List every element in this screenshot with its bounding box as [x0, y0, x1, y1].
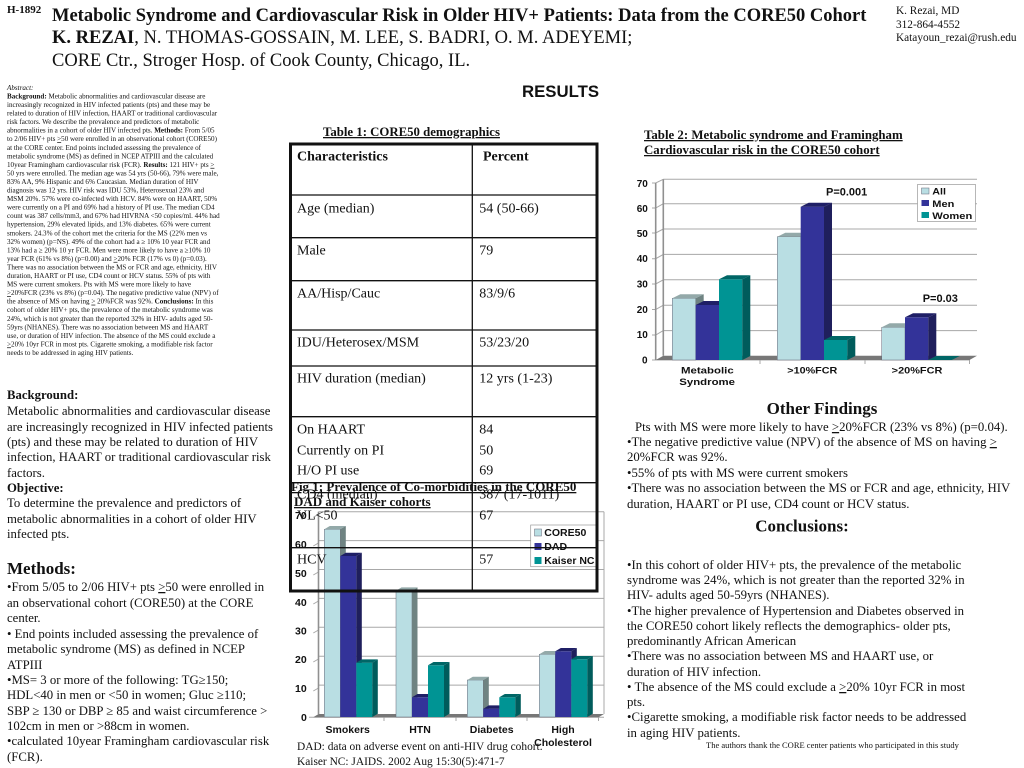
- metabolic syndrome bars: [672, 275, 750, 360]
- conclusions text: syndrome was 24%, which is not greater than the reported 32% in: [627, 573, 965, 587]
- y axis labels: 20: [637, 305, 648, 316]
- diabetes bars: [467, 677, 521, 717]
- methods text: (FCR).: [7, 750, 43, 764]
- abstract text: hypertension, 29% elevated lipids, and 13% diabetes. 65% were current: [7, 221, 211, 229]
- table 1 demographics: Percent: [483, 150, 529, 164]
- p value labels: P=0.03: [923, 293, 958, 305]
- legend: DAD: [544, 541, 567, 553]
- legend: Kaiser NC: [544, 555, 595, 567]
- table 1 demographics: 54 (50-66): [479, 202, 539, 216]
- other findings heading: Other Findings: [767, 399, 878, 418]
- conclusions heading: Conclusions:: [755, 516, 849, 536]
- methods text: [7, 559, 270, 764]
- abstract text: duration, HAART or PI use, CD4 count or HCV status. 55% of pts with: [7, 272, 211, 280]
- abstract text: MSM 20%. 57% were co-infected with HCV. 84% were on HAART, 50%: [7, 195, 217, 203]
- conclusions text: •In this cohort of older HIV+ pts, the prevalence of the metabolic: [627, 558, 962, 572]
- abstract text: 10year Framingham cardiovascular risk (FCR). Results: 121 HIV+ pts >: [7, 161, 214, 169]
- methods text: an observational cohort (CORE50) at the CORE: [7, 596, 254, 610]
- figure 1 footnote: [297, 741, 543, 768]
- 10 percent FCR bars: [777, 203, 855, 360]
- poster id: H-1892: [7, 4, 42, 16]
- table 1 demographics: H/O PI use: [297, 464, 359, 478]
- background and objective text: infection, HAART or traditional cardiovascular risk: [7, 450, 271, 464]
- table 1 demographics: Age (median): [297, 202, 375, 216]
- x axis labels: Syndrome: [679, 377, 735, 388]
- legend: Women: [932, 211, 972, 222]
- table 1 demographics: 79: [479, 244, 493, 258]
- y axis labels: [637, 179, 648, 366]
- abstract text: year FCR (61% vs 8%) (p=0.00) and >20% FCR (17% vs 0) (p=0.03).: [7, 255, 207, 263]
- x axis labels: Metabolic: [681, 366, 734, 376]
- table 1 demographics: 67: [479, 508, 493, 524]
- abstract text: diagnosis was 12 yrs. HIV risk was IDU 53%, Heterosexual 23% and: [7, 186, 205, 194]
- figure 1 footnote: Kaiser NC: JAIDS. 2002 Aug 15:30(5):471-7: [297, 756, 505, 768]
- abstract text: related to duration of HIV infection, HAART or traditional cardiovascular: [7, 110, 218, 118]
- background and objective text: (pts) and these may be related to duration of HIV: [7, 435, 259, 449]
- table 1 demographics: 50: [479, 444, 493, 458]
- legend: Men: [932, 199, 954, 210]
- abstract text: at the CORE center. End points included assessing the prevalence of: [7, 144, 202, 152]
- table 2 caption: Cardiovascular risk in the CORE50 cohort: [644, 143, 880, 157]
- x axis labels: >10%FCR: [787, 366, 837, 376]
- table 1 demographics: 57: [479, 552, 493, 568]
- background and objective text: Metabolic abnormalities and cardiovascular disease: [7, 404, 271, 418]
- abstract text: >20%FCR (23% vs 8%) (p=0.04). The negative predictive value (NPV) of: [7, 289, 219, 297]
- table 2 caption: [644, 128, 903, 157]
- background and objective text: infected pts.: [7, 527, 69, 541]
- x axis labels: Smokers: [326, 724, 370, 736]
- table 1 demographics: 84: [479, 422, 493, 438]
- title block: [52, 6, 867, 71]
- abstract text: metabolic syndrome (MS) as defined in NCEP ATPIII and the calculated: [7, 152, 214, 160]
- legend: [918, 184, 976, 222]
- high cholesterol bars: [539, 648, 593, 717]
- abstract text: MS were current smokers. Pts with MS were more likely to have: [7, 281, 191, 289]
- table 1 demographics: VL<50: [297, 508, 338, 524]
- table 2 bar chart: [637, 179, 977, 388]
- x axis labels: [326, 724, 592, 749]
- background and objective text: factors.: [7, 466, 45, 480]
- other findings text: 20%FCR was 92%.: [627, 450, 728, 464]
- conclusions text: pts.: [627, 695, 645, 709]
- abstract text: 32% women) (p=NS). 49% of the cohort had a ≥ 10% 10 year FCR and: [7, 238, 211, 246]
- abstract text: use, or duration of HIV infection. The absence of the MS could exclude a: [7, 332, 216, 340]
- background and objective text: To determine the prevalence and predictors of: [7, 496, 242, 510]
- contact details: [896, 5, 1017, 44]
- abstract text: abnormalities in a cohort of older HIV infected pts. Methods: From 5/05: [7, 127, 215, 135]
- x axis labels: High: [551, 724, 575, 736]
- other findings text: •55% of pts with MS were current smokers: [627, 466, 848, 480]
- background and objective text: [7, 388, 273, 541]
- methods text: •From 5/05 to 2/06 HIV+ pts >50 were enrolled in: [7, 580, 265, 594]
- table 1 demographics: 12 yrs (1-23): [479, 372, 553, 386]
- figure 1 caption: Fig 1: Prevalence of Co-morbidities in the CORE50: [291, 479, 576, 494]
- table 1 demographics: CD4 (median): [297, 488, 378, 502]
- x axis labels: Diabetes: [470, 724, 514, 736]
- y axis labels: 50: [637, 229, 648, 240]
- abstract text: smokers. 24.3% of the cohort met the criteria for the MS (22% men vs: [7, 229, 207, 237]
- table 1 demographics: Currently on PI: [297, 444, 384, 458]
- figure 1 caption: DAD and Kaiser cohorts: [294, 494, 431, 509]
- methods text: HDL<40 in men or <50 in women; Gluc ≥110;: [7, 688, 246, 702]
- abstract text: Background: Metabolic abnormalities and cardiovascular disease are: [7, 92, 205, 100]
- methods text: metabolic syndrome (MS) as defined in NCEP: [7, 642, 245, 656]
- x axis labels: HTN: [409, 724, 431, 736]
- x axis labels: >20%FCR: [892, 366, 942, 376]
- conclusions text: in aging HIV patients.: [627, 726, 740, 740]
- conclusions text: •There was no association between MS and HAART use, or: [627, 649, 934, 663]
- abstract text: needs to be addressed in aging HIV patients.: [7, 349, 134, 357]
- methods text: ATPIII: [7, 658, 42, 672]
- other findings text: duration, HAART or PI use, CD4 count or HCV status.: [627, 497, 909, 511]
- other findings text: [627, 420, 1011, 511]
- table 1 demographics: 53/23/20: [479, 336, 529, 350]
- abstract text: cohort of older HIV+ pts, the prevalence of the metabolic syndrome was: [7, 306, 213, 314]
- background and objective text: metabolic abnormalities in a cohort of older HIV: [7, 512, 257, 526]
- background and objective text: are increasingly recognized in HIV infected patients: [7, 420, 273, 434]
- legend: All: [932, 186, 946, 198]
- smokers bars: [324, 526, 378, 717]
- abstract text: risk factors. We describe the prevalence and predictors of metabolic: [7, 118, 199, 126]
- abstract text: 13% had a ≥ 20% 10 yr FCR. Men were more likely to have a ≥10% 10: [7, 246, 211, 254]
- y axis labels: 0: [301, 712, 307, 724]
- table 2 caption: Table 2: Metabolic syndrome and Framingham: [644, 128, 903, 142]
- y axis labels: 10: [637, 330, 648, 341]
- abstract text: 24%, which is not greater than the reported 32% in HIV- adults aged 50-: [7, 315, 213, 323]
- x axis labels: Cholesterol: [534, 737, 592, 749]
- background and objective text: Objective:: [7, 481, 64, 495]
- abstract text: were currently on a PI and 69% had a history of PI use. The median CD4: [7, 204, 215, 212]
- other findings text: •The negative predictive value (NPV) of the absence of MS on having >: [627, 435, 997, 449]
- methods text: •MS= 3 or more of the following: TG≥150;: [7, 673, 228, 687]
- legend: CORE50: [544, 527, 586, 539]
- legend: [531, 525, 597, 567]
- methods text: Methods:: [7, 559, 76, 578]
- methods text: •calculated 10year Framingham cardiovascular risk: [7, 734, 270, 748]
- y axis labels: 30: [295, 626, 307, 638]
- y axis labels: 70: [637, 179, 648, 190]
- table 1 demographics: [290, 144, 597, 591]
- contact details: 312-864-4552: [896, 19, 960, 31]
- abstract text: >20% 10yr FCR in most pts. Cigarette smoking, a modifiable risk factor: [7, 340, 213, 348]
- contact details: Katayoun_rezai@rush.edu: [896, 32, 1017, 44]
- acknowledgement: The authors thank the CORE center patients who participated in this study: [706, 740, 960, 750]
- table 1 demographics: Characteristics: [297, 150, 389, 164]
- table 1 demographics: 387 (17-1011): [479, 488, 560, 502]
- conclusions text: predominantly African American: [627, 634, 797, 648]
- results heading: RESULTS: [522, 82, 599, 101]
- other findings text: Pts with MS were more likely to have >20%FCR (23% vs 8%) (p=0.04).: [635, 420, 1008, 434]
- methods text: 102cm in men or >88cm in women.: [7, 719, 189, 733]
- conclusions text: [627, 558, 967, 740]
- methods text: • End points included assessing the prevalence of: [7, 627, 259, 641]
- y axis labels: 50: [295, 568, 307, 580]
- 20 percent FCR bars: [882, 313, 960, 360]
- y axis labels: 40: [637, 254, 648, 265]
- abstract text: the absence of MS on having > 20%FCR was 92%. Conclusions: In this: [7, 298, 214, 306]
- y axis labels: 20: [295, 654, 307, 666]
- abstract text: 59yrs (NHANES). There was no association between MS and HAART: [7, 323, 209, 331]
- conclusions text: •The higher prevalence of Hypertension and Diabetes observed in: [627, 604, 965, 618]
- table 1 caption: Table 1: CORE50 demographics: [323, 125, 500, 139]
- conclusions text: duration of HIV infection.: [627, 665, 761, 679]
- p value labels: P=0.001: [826, 186, 867, 198]
- y axis labels: 60: [637, 204, 648, 215]
- table 1 demographics: Male: [297, 244, 326, 258]
- other findings text: •There was no association between the MS or FCR and age, ethnicity, HIV: [627, 481, 1011, 495]
- conclusions text: •Cigarette smoking, a modifiable risk factor needs to be addressed: [627, 710, 967, 724]
- figure 1 caption: [291, 479, 576, 509]
- abstract text: to 2/06 HIV+ pts >50 were enrolled in an observational cohort (CORE50): [7, 135, 218, 143]
- abstract text: count was 387 cells/mm3, and 67% had HIVRNA <50 copies/ml. 44% had: [7, 212, 220, 220]
- contact details: K. Rezai, MD: [896, 5, 959, 17]
- table 1 demographics: 69: [479, 464, 493, 478]
- table 1 demographics: AA/Hisp/Cauc: [297, 286, 380, 302]
- p value labels: [826, 186, 958, 305]
- methods text: SBP ≥ 130 or DBP ≥ 85 and waist circumference >: [7, 704, 267, 718]
- abstract text: 50 yrs were enrolled. The median age was 54 yrs (50-66), 79% were male,: [7, 169, 219, 177]
- abstract text: 83% AA, 9% Hispanic and 6% Caucasian. Median duration of HIV: [7, 178, 199, 186]
- conclusions text: the CORE50 cohort likely reflects the demographics- older pts,: [627, 619, 951, 633]
- y axis labels: 0: [642, 356, 648, 366]
- title block: CORE Ctr., Stroger Hosp. of Cook County, Chicago, IL.: [52, 51, 470, 71]
- y axis labels: 10: [295, 683, 307, 695]
- figure 1 footnote: DAD: data on adverse event on anti-HIV drug cohort.: [297, 741, 543, 753]
- y axis labels: [295, 510, 307, 724]
- table 1 demographics: HIV duration (median): [297, 372, 426, 386]
- x axis labels: [679, 366, 942, 388]
- figure 1 bar chart: [295, 510, 604, 749]
- table 1 demographics: HCV: [297, 552, 327, 568]
- title block: Metabolic Syndrome and Cardiovascular Risk in Older HIV+ Patients: Data from the CORE50 Cohort: [52, 6, 867, 26]
- table 1 demographics: On HAART: [297, 422, 365, 438]
- abstract text: There was no association between the MS or FCR and age, ethnicity, HIV: [7, 264, 218, 272]
- y axis labels: 30: [637, 280, 648, 290]
- y axis labels: 40: [295, 597, 307, 609]
- title block: K. REZAI, N. THOMAS-GOSSAIN, M. LEE, S. BADRI, O. M. ADEYEMI;: [52, 28, 632, 48]
- methods text: center.: [7, 611, 41, 625]
- table 1 demographics: IDU/Heterosex/MSM: [297, 336, 420, 350]
- conclusions text: HIV- adults aged 50-59yrs (NHANES).: [627, 588, 829, 602]
- table 1 demographics: 83/9/6: [479, 286, 515, 302]
- y axis labels: 70: [295, 510, 307, 522]
- background and objective text: Background:: [7, 388, 78, 402]
- HTN bars: [396, 587, 450, 717]
- abstract text: increasingly recognized in HIV infected patients (pts) and these may be: [7, 101, 210, 109]
- abstract text: Abstract:: [6, 84, 33, 92]
- abstract text: [6, 84, 220, 357]
- y axis labels: 60: [295, 539, 307, 551]
- conclusions text: • The absence of the MS could exclude a >20% 10yr FCR in most: [627, 680, 966, 694]
